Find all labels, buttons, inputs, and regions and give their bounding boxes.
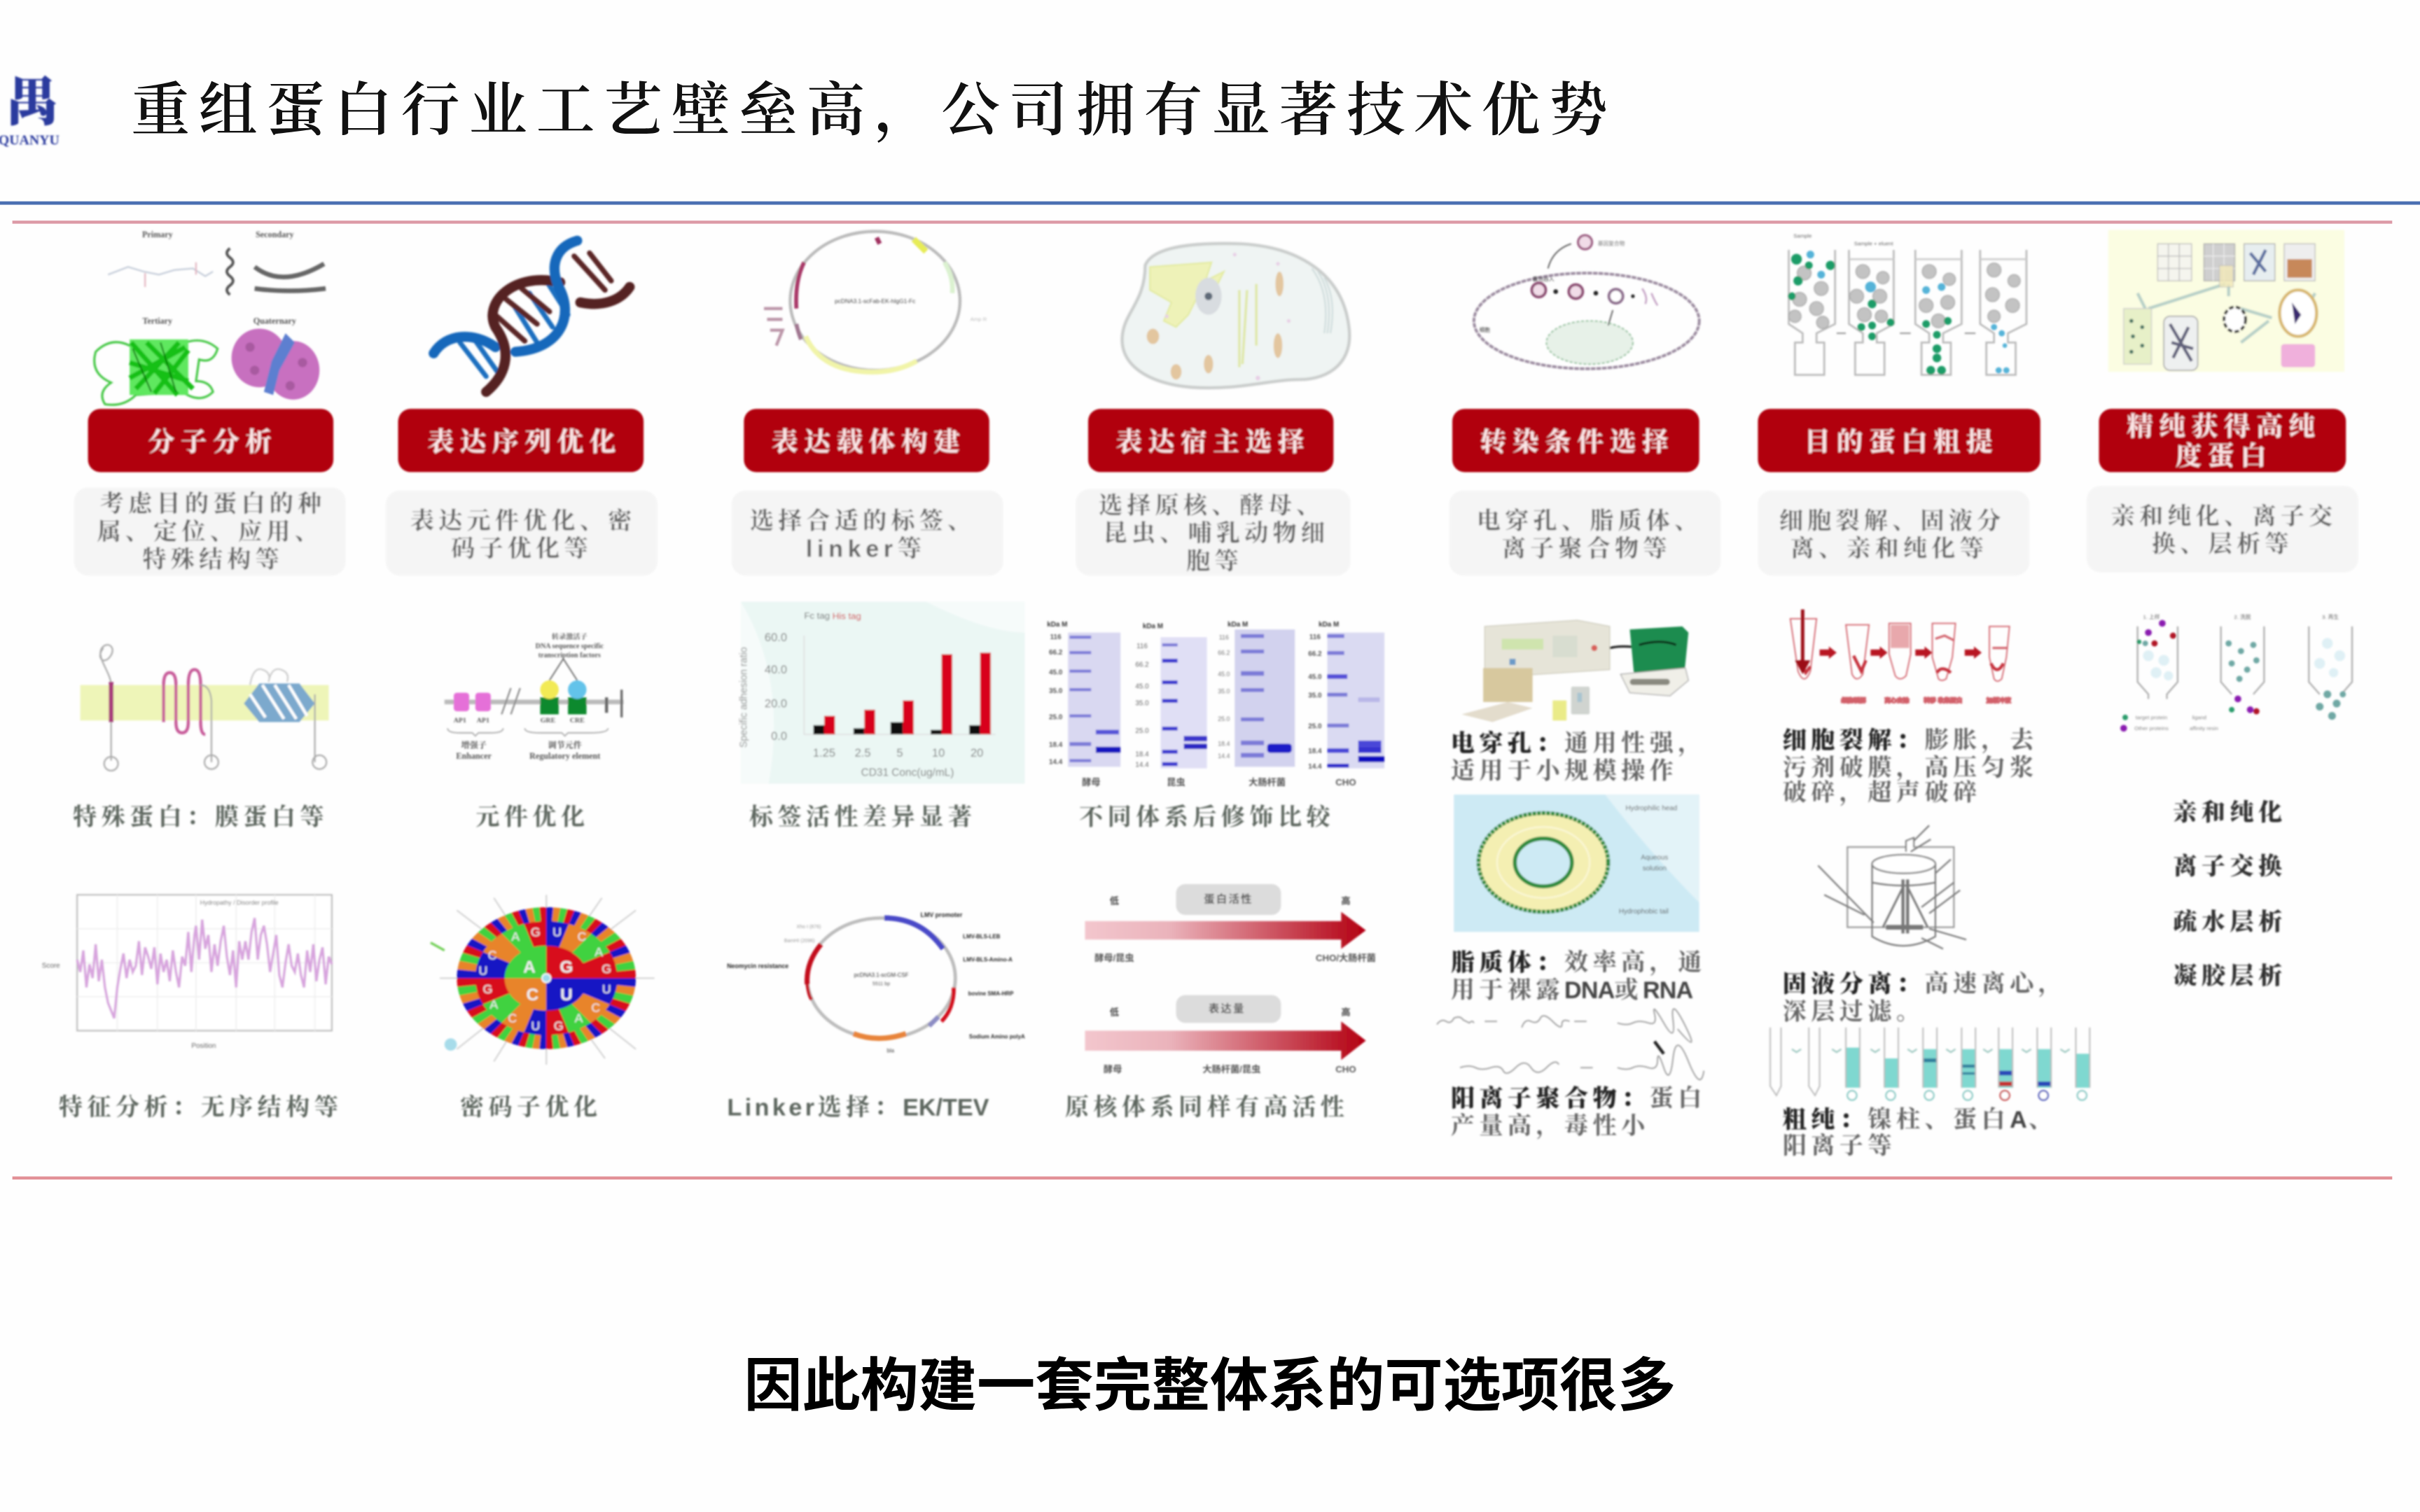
icon: transfection pathway: 细胞 [1480,326,1490,333]
chart: codon wheel: C [508,1011,517,1026]
chart: codon wheel: G [559,958,573,976]
icon: regulatory elements [445,632,623,761]
button: vector construction [744,409,989,472]
arrow: expression level: 大肠杆菌/昆虫 [1202,1063,1260,1074]
chart: codon wheel: U [560,986,573,1004]
icon: SDS-PAGE gels: 116 [1136,643,1148,650]
note: host selection: 胞等 [1186,548,1243,575]
icon: SDS-PAGE gels: 66.2 [1308,650,1322,658]
bar chart: tag activity: Fc tag His tag [804,610,861,621]
icon: transfection pathway: 囊泡吞入 [1533,275,1555,282]
icon: SDS-PAGE gels: 66.2 [1049,649,1063,657]
text: liposome: 脂质体：效率高，通 [1451,949,1706,976]
chart: disorder profile [42,895,332,1050]
arrow: expression level: CHO [1335,1064,1356,1074]
icon: SDS-PAGE gels: kDa M [1319,621,1339,629]
logo: 禺 [6,74,59,132]
bar chart: tag activity: CD31 Conc(ug/mL) [861,767,954,779]
icon: protein structure levels: Primary [142,230,173,239]
chart: disorder profile: Hydropathy / Disorder profile [200,899,279,906]
text: liposome line 2: 用于裸露DNA或RNA [1451,977,1693,1004]
icon: regulatory elements: transcription factors [538,652,601,659]
note: vector construction [732,491,1003,575]
icon: SDS-PAGE gels: 25.0 [1135,727,1149,735]
icon: chromatography columns: Sample + eluent [1854,241,1894,247]
diagram: liposome: Hydrophobic tail [1619,908,1669,916]
icon: animal cell [1122,244,1349,388]
icon: linker plasmid: bla [886,1047,895,1054]
text: crude purification: 粗纯：镍柱、蛋白A、 [1783,1107,2057,1133]
button: molecular analysis [88,409,333,472]
note: crude extraction: 细胞裂解、固液分 [1779,507,2005,534]
button: host selection: 表达宿主选择 [1116,428,1310,457]
icon: electroporator [1461,620,1688,722]
arrow: protein activity: CHO/大肠杆菌 [1316,952,1376,963]
icon: DNA helix [433,241,630,392]
note: host selection [1076,489,1351,575]
icon: SDS-PAGE gels: 35.0 [1308,692,1322,700]
note: molecular analysis: 考虑目的蛋白的种 [100,491,326,517]
icon: SDS-PAGE gels: 14.4 [1308,763,1322,771]
icon: SDS-PAGE gels: kDa M [1047,621,1067,629]
icon: separation columns: affinity resin [2190,725,2218,732]
arrow: protein activity: 蛋白活性 [1204,892,1253,905]
icon: SDS-PAGE gels: kDa M [1228,621,1248,629]
bar chart: tag activity: 5 [896,746,903,760]
button: crude extraction: 目的蛋白粗提 [1804,428,1998,457]
note: molecular analysis: 属、定位、应用、 [97,519,323,545]
icon: SDS-PAGE gels: 25.0 [1218,715,1230,722]
button: transfection [1452,409,1699,472]
icon: membrane protein [81,645,328,771]
text: electroporation: 电穿孔：通用性强， [1451,729,1706,757]
icon: SDS-PAGE gels: 大肠杆菌 [1249,776,1286,788]
arrow: expression level [1085,995,1366,1074]
button: polishing [2099,409,2346,472]
icon: SDS-PAGE gels: 14.4 [1049,758,1063,766]
diagram: centrifuge [1818,825,1966,949]
button: molecular analysis: 分子分析 [148,428,278,457]
title: 重组蛋白行业工艺壁垒高，公司拥有显著技术优势 [131,78,1617,144]
icon: lysis tubes: 加缓冲液 [1987,696,2011,704]
note: host selection: 选择原核、酵母、 [1099,492,1325,519]
icon: regulatory elements: Enhancer [456,751,492,761]
chart: codon wheel [431,895,655,1065]
icon: regulatory elements: 增强子 [461,740,487,750]
icon: linker plasmid: pcDNA3.1-scGM-CSF [854,972,909,978]
chart: codon wheel: G [483,982,492,996]
column 1: molecular analysis [42,230,346,1121]
bottom content rule [13,1177,2392,1180]
chart: codon wheel: G [531,925,541,939]
column 5: transfection [1437,235,1721,1139]
column 2: sequence optimisation [386,241,658,1121]
icon: linker plasmid: BamHI (2096) [784,939,815,944]
button: sequence optimisation: 表达序列优化 [428,428,622,457]
icon: regulatory elements: 调节元件 [548,740,582,750]
icon: linker plasmid: LMV promoter [921,911,963,918]
diagram: liposome: solution [1643,864,1667,872]
text: crude purification line 2: 阳离子等 [1783,1132,1896,1159]
icon: lysis tubes: 转移 收集蛋白 [1924,696,1963,704]
note: sequence optimisation: 码子优化等 [451,536,592,562]
icon: linker plasmid: bovine SMA-HRP [968,990,1014,997]
text: cationic polymer: 阳离子聚合物：蛋白 [1451,1084,1706,1112]
note: sequence optimisation [386,491,658,575]
list: polishing methods [2173,799,2287,990]
chart: disorder profile: Score [42,962,60,969]
text: electroporation line 2: 适用于小规模操作 [1451,758,1678,785]
icon: separation columns: Other proteins [2134,725,2169,732]
note: crude extraction: 离、亲和纯化等 [1790,535,1988,562]
bar chart: tag activity: 0.0 [771,729,787,743]
chart: codon wheel: A [594,945,603,959]
note: molecular analysis: 特殊结构等 [142,547,284,573]
caption: 特殊蛋白：膜蛋白等 [73,804,328,831]
column 7: polishing [2087,230,2358,990]
header rule [0,202,2420,204]
chart: codon wheel: U [479,963,487,977]
icon: separation columns: 2. 洗脱 [2234,613,2251,620]
icon: polishing process [2108,230,2344,372]
bar chart: tag activity: 10 [932,746,945,760]
icon: SDS-PAGE gels: 25.0 [1308,723,1322,731]
icon: regulatory elements: Regulatory element [529,751,600,761]
bar chart: tag activity: 1.25 [813,746,835,760]
icon: SDS-PAGE gels: 45.0 [1049,668,1063,676]
top content rule [13,220,2392,224]
icon: SDS-PAGE gels: 45.0 [1135,682,1149,690]
icon: purification steps [1770,1028,2089,1100]
icon: transfection pathway [1474,235,1699,369]
note: transfection [1449,491,1721,575]
caption: Linker选择：EK/TEV [727,1094,989,1121]
icon: SDS-PAGE gels: CHO [1335,777,1356,788]
icon: regulatory elements: AP1 [477,717,489,724]
icon: SDS-PAGE gels: 116 [1050,634,1062,641]
chart: codon wheel: A [575,1011,583,1026]
arrow: protein activity [1085,884,1376,963]
icon: linker plasmid: LMV-BLS-LEB [963,933,1001,939]
chart: codon wheel: A [489,997,498,1011]
note: polishing: 换、层析等 [2152,531,2293,558]
list: polishing methods: 离子交换 [2173,853,2287,880]
bar chart: tag activity: 2.5 [855,746,871,760]
caption: 不同体系后修饰比较 [1079,804,1335,831]
button: polishing: 度蛋白 [2176,442,2272,471]
note: vector construction: 选择合适的标签、 [750,507,975,534]
icon: chromatography columns [1788,233,2026,375]
icon: protein structure levels [95,230,326,405]
chart: codon wheel: A [511,930,520,944]
chart: codon wheel: A [523,958,536,976]
note: sequence optimisation: 表达元件优化、密 [410,507,636,534]
list: polishing methods: 亲和纯化 [2173,799,2287,826]
note: molecular analysis [74,487,346,575]
icon: SDS-PAGE gels: 昆虫 [1167,777,1185,788]
arrow: expression level: 高 [1341,1006,1351,1017]
button: polishing: 精纯获得高纯 [2127,412,2321,442]
icon: protein structure levels: Tertiary [143,316,172,326]
icon: lysis tubes: 细胞裂解 [1842,696,1866,704]
chart: codon wheel: G [554,1019,564,1033]
icon: separation columns: target protein [2136,714,2167,720]
icon: SDS-PAGE gels: 25.0 [1049,713,1063,721]
button: vector construction: 表达载体构建 [772,428,966,457]
icon: linker plasmid: 5511 bp [872,982,890,987]
bar chart: tag activity [738,602,1025,784]
icon: separation columns [2120,613,2352,732]
diagram: liposome [1454,794,1699,932]
icon: SDS-PAGE gels: 45.0 [1218,671,1230,678]
bar chart: tag activity: Specific adhesion ratio [738,647,749,748]
icon: linker plasmid: Xho I (876) [797,925,821,930]
icon: SDS-PAGE gels: kDa M [1143,622,1163,630]
text: cell lysis line 3: 破碎，超声破碎 [1783,779,1982,806]
icon: plasmid map: pcDNA3.1-scFab-EK-hIgG1-Fc [835,298,915,304]
logo [0,74,60,148]
icon: SDS-PAGE gels: 酵母 [1082,777,1101,788]
icon: SDS-PAGE gels: 45.0 [1308,673,1322,681]
arrow: expression level: 酵母 [1104,1064,1122,1074]
bar chart: tag activity: 20 [971,746,983,760]
diagram: liposome: Aqueous [1641,854,1668,862]
arrow: protein activity: 低 [1110,895,1119,906]
caption: 密码子优化 [460,1094,602,1121]
logo: QUANYU [0,133,60,148]
arrow: expression level: 表达量 [1209,1002,1246,1015]
chart: codon wheel: G [601,962,611,976]
icon: SDS-PAGE gels: 35.0 [1135,700,1149,708]
bar chart: tag activity: 60.0 [765,631,787,644]
text: solid-liquid separation: 固液分离：高速离心， [1783,970,2066,997]
icon: separation columns: 3. 再生 [2322,613,2339,620]
bar chart: tag activity: 20.0 [765,697,787,710]
arrow: expression level: 低 [1110,1006,1119,1017]
icon: transfection pathway: 基因复合物 [1598,240,1625,247]
icon: separation columns: ligand [2192,714,2206,720]
icon: separation columns: 1. 上样 [2143,613,2160,620]
column 3: vector construction [727,232,1025,1121]
icon: plasmid map: Amp R [971,316,987,323]
icon: linker plasmid [727,911,1025,1054]
note: transfection: 离子聚合物等 [1502,535,1671,562]
icon: chromatography columns: Sample [1793,233,1811,239]
note: host selection: 昆虫、哺乳动物细 [1104,520,1329,547]
icon: linker plasmid: Neomycin resistance [727,962,788,969]
note: transfection: 电穿孔、脂质体、 [1477,507,1703,534]
chart: codon wheel: C [488,948,497,962]
conclusion: 因此构建一套完整体系的可选项很多 [744,1353,1676,1418]
note: polishing: 亲和纯化、离子交 [2111,503,2337,530]
button: host selection [1088,409,1333,472]
diagram: polymer binding [1437,1009,1704,1079]
icon: regulatory elements: AP1 [454,717,466,724]
icon: SDS-PAGE gels [1047,621,1384,788]
icon: SDS-PAGE gels: 116 [1219,634,1229,640]
chart: codon wheel: U [602,982,611,996]
icon: SDS-PAGE gels: 18.4 [1049,741,1063,749]
text: cell lysis line 2: 污剂破膜，高压匀浆 [1783,755,2038,781]
icon: regulatory elements: DNA sequence specific [536,643,604,650]
icon: SDS-PAGE gels: 35.0 [1218,687,1230,694]
chart: disorder profile: Position [191,1042,216,1050]
icon: regulatory elements: GRE [541,717,556,724]
button: crude extraction [1758,409,2040,472]
icon: SDS-PAGE gels: 116 [1309,634,1321,641]
button: transfection: 转染条件选择 [1480,427,1674,457]
icon: lysis tubes: 离心去除 [1884,696,1910,704]
list: polishing methods: 凝胶层析 [2173,963,2287,990]
icon: SDS-PAGE gels: 35.0 [1049,687,1063,695]
icon: plasmid map [764,232,987,372]
icon: linker plasmid: Sodium Amino polyA [969,1034,1025,1040]
icon: regulatory elements: 转录激活子 [552,632,587,641]
icon: linker plasmid: LMV-BLS-Amino-A [963,956,1013,962]
icon: SDS-PAGE gels: 66.2 [1218,649,1230,656]
note: polishing [2087,486,2358,573]
icon: SDS-PAGE gels: 14.4 [1218,752,1230,760]
icon: SDS-PAGE gels: 66.2 [1135,661,1149,668]
note: vector construction: linker等 [806,536,926,563]
list: polishing methods: 疏水层析 [2173,909,2287,936]
icon: regulatory elements: CRE [570,717,585,724]
chart: codon wheel: C [527,986,538,1004]
button: sequence optimisation [398,409,644,472]
text: cationic polymer line 2: 产量高，毒性小 [1451,1112,1650,1139]
column 6: crude extraction [1758,233,2089,1159]
text: cell lysis: 细胞裂解：膨胀，去 [1783,727,2038,753]
icon: SDS-PAGE gels: 18.4 [1135,750,1149,758]
chart: codon wheel: C [591,1000,600,1014]
icon: protein structure levels: Quaternary [253,316,296,326]
caption: 元件优化 [475,804,590,831]
chart: codon wheel: U [531,1019,540,1033]
chart: codon wheel: C [578,930,587,944]
bar chart: tag activity: 40.0 [765,663,787,676]
text: solid-liquid separation line 2: 深层过滤。 [1783,998,1924,1025]
arrow: protein activity: 酵母/昆虫 [1094,953,1134,963]
icon: SDS-PAGE gels: 18.4 [1218,740,1230,747]
icon: lysis tubes [1790,610,2011,704]
caption: 原核体系同样有高活性 [1065,1094,1349,1121]
diagram: liposome: Hydrophilic head [1625,804,1677,812]
icon: protein structure levels: Secondary [256,230,294,239]
caption: 标签活性差异显著 [749,804,976,831]
chart: codon wheel: U [552,925,562,939]
arrow: protein activity: 高 [1341,895,1351,906]
icon: SDS-PAGE gels: 14.4 [1135,762,1149,769]
note: crude extraction [1758,491,2029,575]
icon: SDS-PAGE gels: 18.4 [1308,748,1322,755]
caption: 特征分析：无序结构等 [59,1094,342,1121]
column 4: host selection [1047,244,1384,1121]
